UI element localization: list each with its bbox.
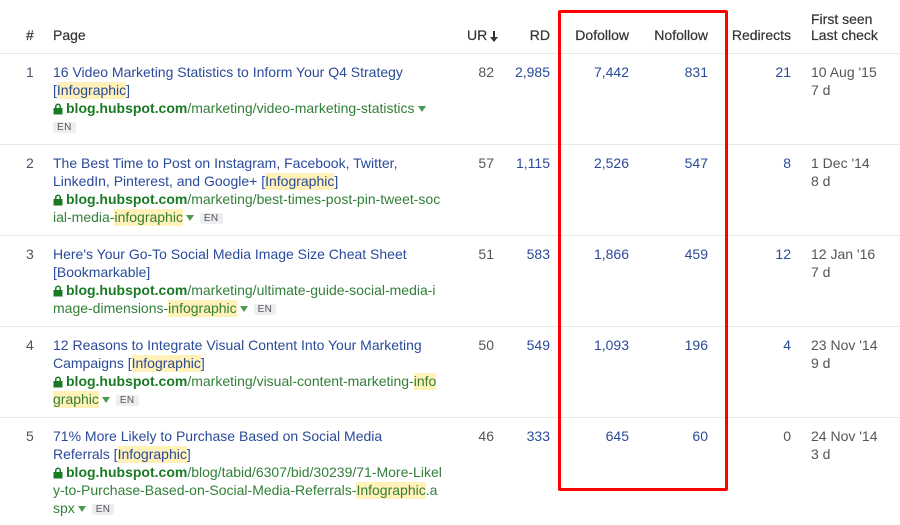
row 5: 46 bbox=[478, 428, 494, 444]
row 3: 51 bbox=[478, 246, 494, 262]
table header: Last check bbox=[811, 27, 878, 43]
row 4: EN bbox=[120, 395, 135, 406]
row 4: graphic bbox=[53, 391, 99, 407]
table header: # bbox=[26, 27, 34, 43]
row 1: 7 d bbox=[811, 82, 830, 98]
table header: Page bbox=[53, 27, 86, 43]
row 5 bbox=[26, 428, 878, 516]
row 5: EN bbox=[96, 504, 110, 515]
row 4: 196 bbox=[685, 337, 708, 353]
table header: First seen bbox=[811, 11, 872, 27]
row 1: 16 Video Marketing Statistics to Inform Your Q4 Strategy bbox=[53, 64, 403, 80]
row 5: 24 Nov '14 bbox=[811, 428, 878, 444]
red highlight box bbox=[558, 10, 728, 491]
row 4: 9 d bbox=[811, 355, 830, 371]
row 4: 4 bbox=[26, 337, 34, 353]
row 5: 5 bbox=[26, 428, 34, 444]
row 1: 2,985 bbox=[515, 64, 550, 80]
row 4: 4 bbox=[783, 337, 791, 353]
row 1: blog.hubspot.com/marketing/video-marketing-statistics bbox=[66, 100, 415, 116]
table header: Redirects bbox=[732, 27, 791, 43]
row 3: 12 Jan '16 bbox=[811, 246, 875, 262]
row 4: 12 Reasons to Integrate Visual Content Into Your Marketing bbox=[53, 337, 422, 353]
row 1: [Infographic] bbox=[53, 82, 130, 98]
row 3: [Bookmarkable] bbox=[53, 264, 150, 280]
row 1: EN bbox=[57, 122, 72, 133]
row 2: 2 bbox=[26, 155, 34, 171]
row 4: 23 Nov '14 bbox=[811, 337, 878, 353]
row 2: 1,115 bbox=[516, 155, 550, 171]
row 3: 3 bbox=[26, 246, 34, 262]
table header: Nofollow bbox=[654, 27, 708, 43]
row 2: 1 Dec '14 bbox=[811, 155, 870, 171]
row 4 bbox=[26, 337, 878, 408]
row 3: 1,866 bbox=[594, 246, 629, 262]
row 2: 8 d bbox=[811, 173, 830, 189]
table header: Dofollow bbox=[575, 27, 629, 43]
row 4: blog.hubspot.com/marketing/visual-content-marketing-info bbox=[66, 373, 436, 389]
row 1 bbox=[26, 64, 877, 133]
row 5: 333 bbox=[527, 428, 550, 444]
table header: UR bbox=[467, 27, 487, 43]
row 3: EN bbox=[258, 304, 272, 315]
row 5: Referrals [Infographic] bbox=[53, 446, 191, 462]
row 5: spx bbox=[53, 500, 75, 516]
row 2: EN bbox=[204, 213, 219, 224]
row 2: LinkedIn, Pinterest, and Google+ [Infographic] bbox=[53, 173, 338, 189]
row 3: Here's Your Go-To Social Media Image Size Cheat Sheet bbox=[53, 246, 407, 262]
row 5: 0 bbox=[783, 428, 791, 444]
row 1: 7,442 bbox=[594, 64, 629, 80]
row 5: 60 bbox=[692, 428, 708, 444]
row 5: 3 d bbox=[811, 446, 830, 462]
row 5: 645 bbox=[606, 428, 629, 444]
row 1: 1 bbox=[26, 64, 34, 80]
row 4: 549 bbox=[527, 337, 550, 353]
row 3: 12 bbox=[775, 246, 791, 262]
row 2 bbox=[26, 155, 870, 226]
row 4: Campaigns [Infographic] bbox=[53, 355, 205, 371]
row 2: 2,526 bbox=[594, 155, 629, 171]
row 3: 7 d bbox=[811, 264, 830, 280]
row 2: 547 bbox=[685, 155, 708, 171]
row 2: The Best Time to Post on Instagram, Facebook, Twitter, bbox=[53, 155, 397, 171]
row 3 bbox=[26, 246, 875, 317]
row 2: blog.hubspot.com/marketing/best-times-post-pin-tweet-soc bbox=[66, 191, 440, 207]
table header: RD bbox=[530, 27, 550, 43]
row 2: 8 bbox=[783, 155, 791, 171]
row 2: 57 bbox=[478, 155, 494, 171]
row 1: 831 bbox=[685, 64, 708, 80]
row 4: 50 bbox=[478, 337, 494, 353]
table header bbox=[26, 11, 878, 44]
row 5: blog.hubspot.com/blog/tabid/6307/bid/30239/71-More-Likel bbox=[66, 464, 442, 480]
row 3: blog.hubspot.com/marketing/ultimate-guide-social-media-i bbox=[66, 282, 436, 298]
row 3: 583 bbox=[527, 246, 550, 262]
row 2: ial-media-infographic bbox=[53, 209, 183, 225]
row 5: y-to-Purchase-Based-on-Social-Media-Referrals-Infographic.a bbox=[53, 482, 437, 498]
row 1: 82 bbox=[478, 64, 494, 80]
row 3: 459 bbox=[685, 246, 708, 262]
row 5: 71% More Likely to Purchase Based on Social Media bbox=[53, 428, 382, 444]
row 3: mage-dimensions-infographic bbox=[53, 300, 237, 316]
row 4: 1,093 bbox=[594, 337, 629, 353]
row 1: 10 Aug '15 bbox=[811, 64, 877, 80]
row 1: 21 bbox=[775, 64, 791, 80]
